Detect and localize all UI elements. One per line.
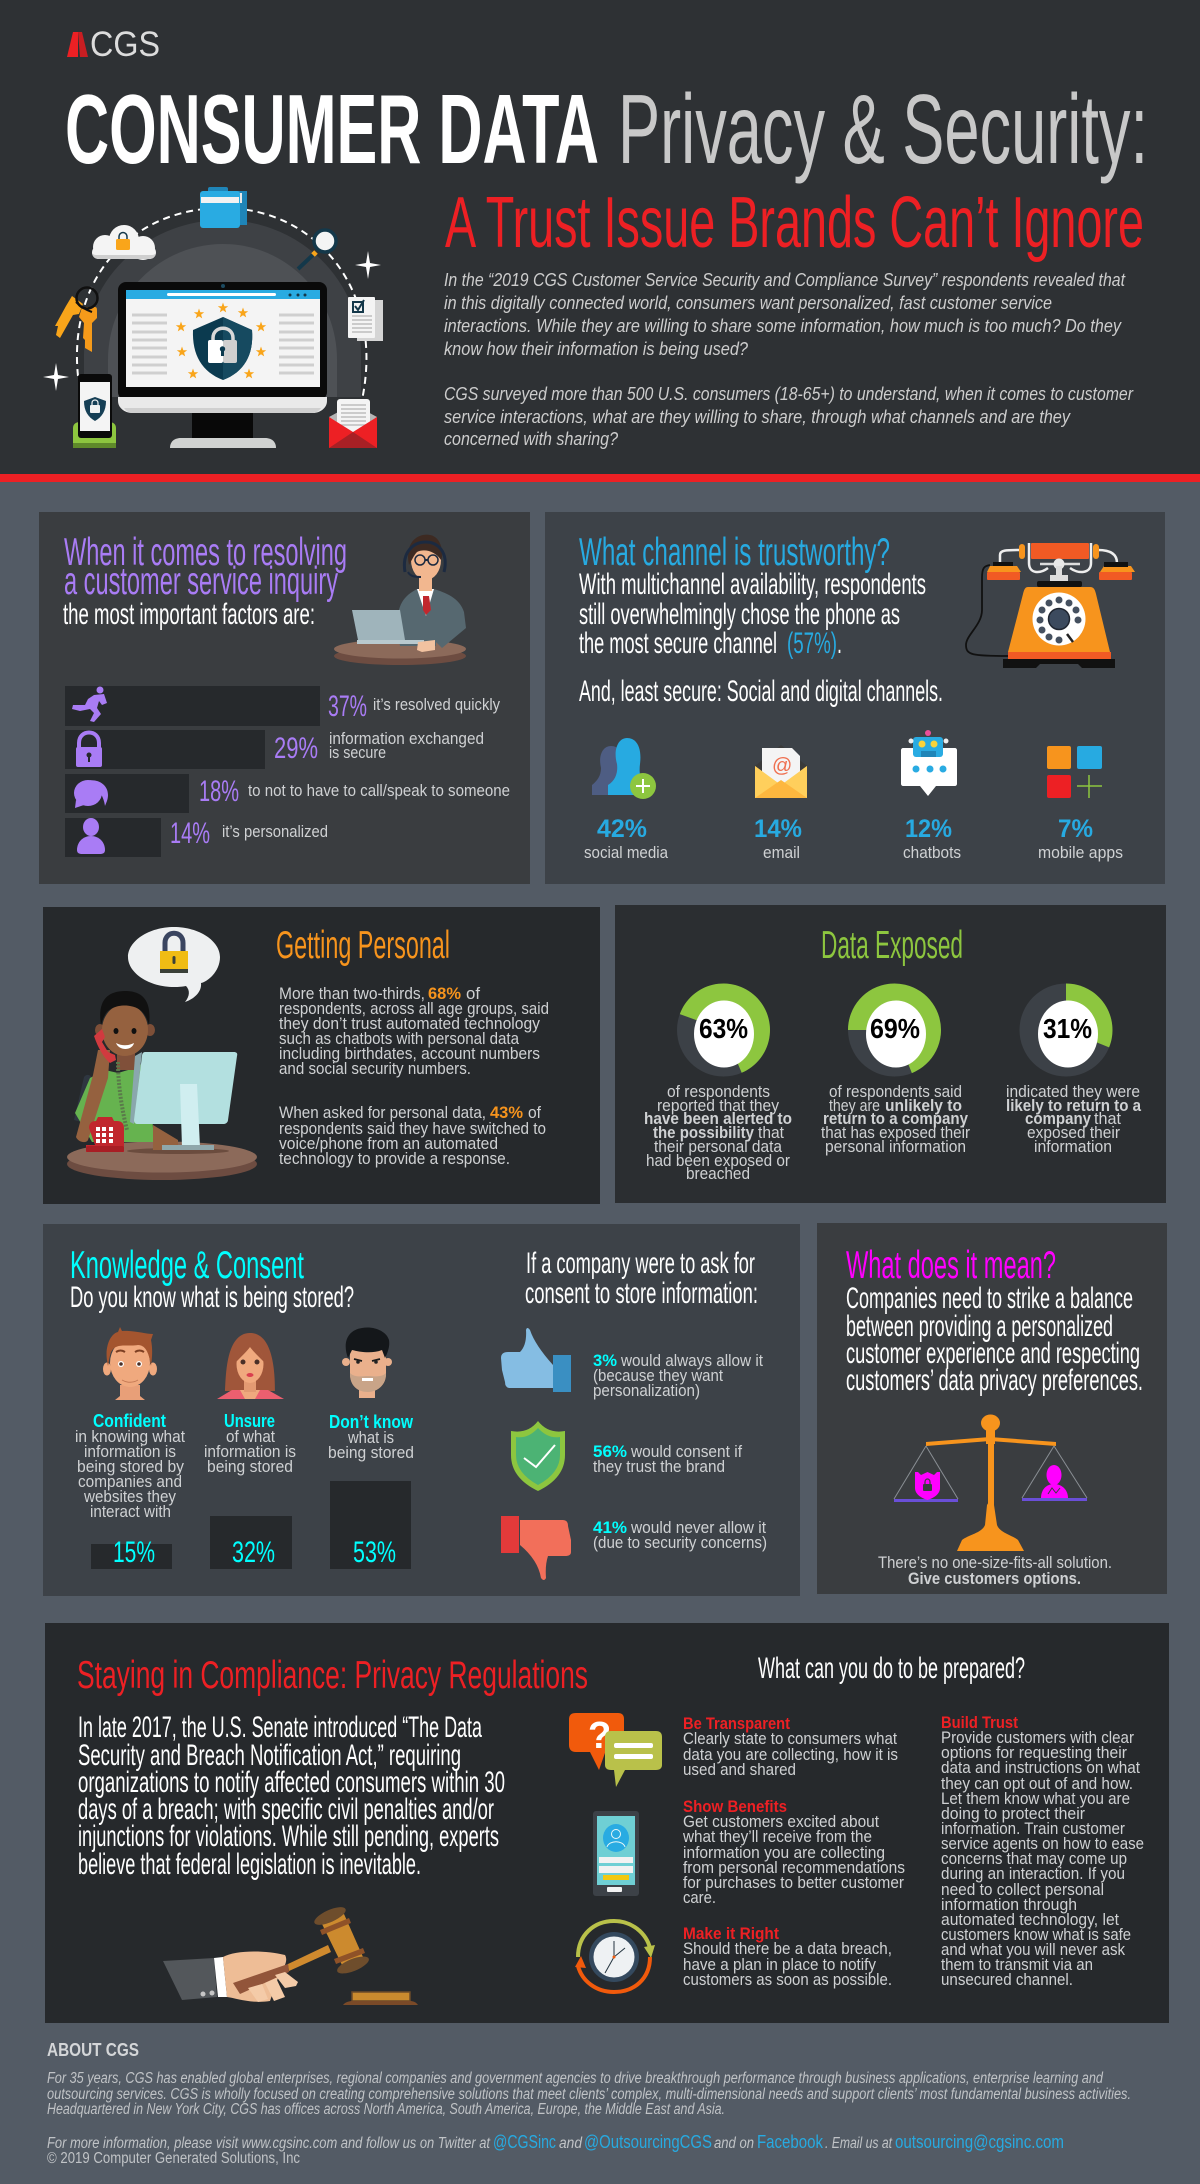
- tip: make it right: [575, 1921, 892, 1992]
- footer: contact line: [47, 2132, 1064, 2167]
- bar: information secure: 29%: [274, 732, 318, 765]
- monitor: [118, 282, 327, 448]
- column: confident: interact with: [90, 1503, 171, 1521]
- footer: about CGS: [47, 2040, 1131, 2118]
- text block: [846, 1282, 1143, 1397]
- bar: no call: 18%: [199, 775, 239, 808]
- icon: lock: [76, 732, 102, 767]
- tip: be transparent: data you are collecting, how it is: [683, 1746, 898, 1764]
- text block: With multichannel availability, respondents: [579, 568, 926, 601]
- illustration: security monitor and devices: [43, 187, 383, 448]
- heading: When it comes to resolving: [64, 531, 347, 574]
- tip: build trust: service agents on how to ease: [941, 1835, 1144, 1853]
- heading: the most important factors are:: [63, 598, 315, 631]
- text: 63%: have been alerted to: [644, 1110, 792, 1128]
- text block: (57%): [787, 627, 837, 660]
- bar: 53%: [330, 1481, 411, 1569]
- donut: 31%: [1020, 984, 1112, 1076]
- text block: organizations to notify affected consumers within 30: [78, 1766, 505, 1799]
- text: 63%: that: [758, 1124, 784, 1142]
- channel: mobile apps: mobile apps: [1038, 844, 1123, 862]
- face: man: [103, 1327, 157, 1400]
- text: 69%: they are: [829, 1097, 880, 1115]
- tip: build trust: doing to protect their: [941, 1805, 1085, 1823]
- column: unsure: [204, 1333, 296, 1569]
- column: unsure: information is: [204, 1443, 296, 1461]
- tip: build trust: need to collect personal: [941, 1881, 1104, 1899]
- footer: contact line: and: [559, 2135, 583, 2152]
- text: 63%: [644, 1083, 792, 1183]
- intro text: service interactions, what are they willing to share, through what channels and are they: [444, 407, 1071, 427]
- text block: Security and Breach Notification Act,” requiring: [78, 1739, 461, 1772]
- cloud lock: [92, 225, 156, 260]
- channel: social media: 42%: [597, 815, 647, 843]
- text: 63%: of respondents: [667, 1083, 770, 1101]
- icon: smartphone: [593, 1811, 639, 1896]
- footer: contact line: © 2019 Computer Generated Solutions, Inc: [47, 2150, 300, 2167]
- bar: resolved quickly: it’s resolved quickly: [373, 696, 501, 714]
- bar: personalized: 14%: [170, 817, 210, 850]
- tip: build trust: they can opt out of and how.: [941, 1775, 1133, 1793]
- text: 31%: likely to return to a: [1006, 1097, 1142, 1115]
- text: 63%: reported that they: [657, 1097, 780, 1115]
- text block: voice/phone from an automated: [279, 1135, 498, 1153]
- consent row: always allow: 3%: [593, 1352, 617, 1370]
- text: 69%: personal information: [825, 1138, 966, 1156]
- panel: getting personal: [43, 907, 600, 1204]
- heading: consent: [525, 1247, 758, 1310]
- channel: mobile apps: [1038, 746, 1123, 862]
- column: confident: companies and: [78, 1473, 182, 1491]
- text: 31%: indicated they were: [1006, 1083, 1140, 1101]
- phone on dock: [73, 374, 116, 448]
- footer: contact line: and on: [714, 2135, 754, 2152]
- panel: staying in compliance: [45, 1623, 1169, 2023]
- heading: Knowledge & Consent: [70, 1244, 304, 1287]
- footer: about CGS: ABOUT CGS: [47, 2040, 139, 2060]
- text block: 68%: [428, 985, 461, 1003]
- text block: When asked for personal data,: [279, 1104, 486, 1122]
- icon: apps: [1047, 746, 1102, 798]
- text: 63%: had been exposed or: [646, 1152, 790, 1170]
- text block: [279, 985, 549, 1168]
- shield with lock: [193, 317, 252, 380]
- tip: build trust: unsecured channel.: [941, 1971, 1073, 1989]
- text block: believe that federal legislation is inevitable.: [78, 1848, 421, 1881]
- channel: chatbots: chatbots: [903, 844, 961, 862]
- donut: 63%: 63%: [699, 1013, 748, 1044]
- intro text: in this digitally connected world, consumers want personalized, fast customer service: [444, 293, 1052, 313]
- envelope: [329, 399, 377, 448]
- icon: social media: [592, 738, 656, 799]
- footer: about CGS: Headquartered in New York City, CGS has offices across North America, South America, Europe, the Middle East and Asia.: [47, 2101, 725, 2118]
- tip: make it right: Make it Right: [683, 1924, 779, 1943]
- footer: contact line: Facebook: [757, 2132, 824, 2152]
- tip: show benefits: for purchases to better customer: [683, 1874, 904, 1892]
- consent row: trust the brand: would consent if: [630, 1443, 742, 1461]
- icon: person: [1041, 1465, 1068, 1498]
- tip: be transparent: [569, 1713, 898, 1787]
- text block: And, least secure: Social and digital channels.: [579, 675, 943, 708]
- footer: contact line: @OutsourcingCGS: [584, 2132, 712, 2152]
- text block: including birthdates, account numbers: [279, 1045, 540, 1063]
- magnifier: [298, 230, 336, 269]
- header panel: [0, 0, 1200, 482]
- caption: There’s no one-size-fits-all solution.: [878, 1554, 1112, 1572]
- panel: data exposed: [615, 905, 1166, 1203]
- icon: shield check: [511, 1421, 565, 1491]
- footer: contact line: outsourcing@cgsinc.com: [895, 2132, 1064, 2152]
- panel: trustworthy channel: [545, 512, 1165, 884]
- tip: build trust: information through: [941, 1896, 1077, 1914]
- text: 31%: that: [1094, 1110, 1121, 1128]
- column: confident: in knowing what: [75, 1428, 185, 1446]
- consent row: never allow: would never allow it: [630, 1519, 766, 1537]
- panel: knowledge and consent: [43, 1224, 800, 1596]
- column: unsure: Unsure: [224, 1411, 275, 1431]
- tip: be transparent: Clearly state to consumers what: [683, 1730, 897, 1748]
- column: don't know: what is: [347, 1429, 394, 1447]
- tip: show benefits: [593, 1797, 905, 1907]
- text: 31%: company: [1025, 1110, 1092, 1128]
- bar: personalized: [65, 817, 328, 857]
- tip: build trust: Provide customers with clear: [941, 1729, 1134, 1747]
- keys: [55, 288, 98, 352]
- tip: build trust: options for requesting their: [941, 1744, 1127, 1762]
- donut: 69%: [848, 983, 941, 1076]
- bar: information secure: information exchanged: [329, 730, 484, 748]
- channel: social media: social media: [584, 844, 669, 862]
- speech bubble with lock: [128, 927, 220, 1002]
- heading: What channel is trustworthy?: [579, 531, 890, 574]
- text: 69%: [821, 1083, 970, 1156]
- heading: Getting Personal: [276, 924, 450, 967]
- heading: consent: If a company were to ask for: [526, 1247, 755, 1280]
- footer: contact line: . Email us at: [825, 2135, 893, 2152]
- text block: injunctions for violations. While still pending, experts: [78, 1820, 499, 1853]
- tip: show benefits: what they’ll receive from the: [682, 1828, 872, 1846]
- icon: runner: [72, 686, 107, 722]
- illustration: man on the phone: [67, 927, 257, 1180]
- consent row: trust the brand: 56%: [593, 1443, 627, 1461]
- text block: respondents, across all age groups, said: [279, 1000, 549, 1018]
- consent row: always allow: personalization): [593, 1382, 700, 1400]
- icon: speech: [74, 780, 108, 808]
- icon: speech bubbles: [569, 1713, 662, 1787]
- logo: CGS: CGS: [90, 25, 160, 64]
- bar: no call: [65, 774, 510, 813]
- bar: 32%: [210, 1516, 292, 1569]
- consent row: trust the brand: they trust the brand: [593, 1458, 725, 1476]
- tip: be transparent: Be Transparent: [683, 1714, 790, 1733]
- heading: a customer service inquiry: [64, 560, 338, 603]
- text block: .: [837, 627, 842, 660]
- text: 31%: information: [1034, 1138, 1112, 1156]
- text block: they don’t trust automated technology: [279, 1015, 541, 1033]
- consent row: never allow: 41%: [593, 1519, 627, 1537]
- icon: email: @: [772, 755, 792, 777]
- tip: build trust: concerns that may come up: [941, 1850, 1127, 1868]
- consent row: always allow: [501, 1328, 763, 1400]
- column: confident: being stored by: [77, 1458, 185, 1476]
- bar: 32%: 32%: [232, 1536, 275, 1569]
- donut: 31%: 31%: [1043, 1013, 1092, 1044]
- tip: be transparent: used and shared: [683, 1761, 796, 1779]
- intro text: concerned with sharing?: [444, 429, 618, 449]
- panel: customer service factors: [39, 512, 530, 884]
- text block: 43%: [490, 1104, 523, 1122]
- heading: What does it mean?: [846, 1244, 1056, 1287]
- text block: of: [466, 985, 480, 1003]
- text: 63%: breached: [686, 1165, 750, 1183]
- tip: make it right: have a plan in place to notify: [683, 1956, 877, 1974]
- text: 31%: [1006, 1083, 1142, 1156]
- tip: show benefits: from personal recommendations: [683, 1859, 905, 1877]
- title: CONSUMER DATA: [65, 74, 599, 184]
- bar: resolved quickly: 37%: [328, 690, 367, 723]
- tip: build trust: data and instructions on what: [941, 1759, 1140, 1777]
- text block: respondents said they have switched to: [279, 1120, 546, 1138]
- illustration: gavel: [163, 1904, 418, 2005]
- bar: 53%: 53%: [353, 1536, 396, 1569]
- donut: 69%: 69%: [870, 1013, 920, 1044]
- text: 63%: their personal data: [654, 1138, 783, 1156]
- consent row: trust the brand: [511, 1421, 742, 1491]
- heading: Staying in Compliance: Privacy Regulations: [77, 1654, 588, 1697]
- consent row: always allow: (because they want: [593, 1367, 723, 1385]
- consent row: never allow: (due to security concerns): [593, 1534, 767, 1552]
- column: unsure: being stored: [207, 1458, 293, 1476]
- heading: prepared: What can you do to be prepared?: [758, 1652, 1025, 1685]
- text block: technology to provide a response.: [279, 1150, 510, 1168]
- column: confident: information is: [84, 1443, 176, 1461]
- column: confident: Confident: [93, 1411, 166, 1431]
- text: 69%: of respondents said: [829, 1083, 962, 1101]
- column: don't know: Don’t know: [329, 1412, 414, 1432]
- heading: Do you know what is being stored?: [70, 1281, 354, 1314]
- footer: contact line: @CGSinc: [493, 2132, 556, 2152]
- tip: show benefits: Show Benefits: [683, 1797, 787, 1816]
- intro text: In the “2019 CGS Customer Service Security and Compliance Survey” respondents revealed that: [444, 270, 1126, 290]
- icon: shield: [915, 1472, 940, 1500]
- tip: build trust: customers know what is safe: [941, 1926, 1131, 1944]
- face: man with stubble: [342, 1328, 392, 1398]
- folder: [200, 187, 247, 228]
- heading: [70, 1244, 354, 1314]
- icon: thumbs down: [501, 1516, 571, 1580]
- text: 69%: that has exposed their: [821, 1124, 970, 1142]
- icon: speech bubbles: ?: [588, 1715, 611, 1757]
- channel: email: 14%: [754, 815, 802, 843]
- donut: 63%: [677, 984, 770, 1076]
- tip: show benefits: care.: [683, 1889, 716, 1907]
- icon: clock: [575, 1921, 655, 1992]
- column: confident: [75, 1327, 185, 1569]
- channel: mobile apps: 7%: [1058, 815, 1093, 843]
- footer: contact line: For more information, please visit www.cgsinc.com and follow us on Twitter at: [47, 2135, 491, 2152]
- caption: [878, 1554, 1112, 1588]
- intro text: interactions. While they are willing to share some information, how much is too much? Do they: [444, 316, 1122, 336]
- text block: of: [528, 1104, 541, 1122]
- text block: still overwhelmingly chose the phone as: [579, 598, 900, 631]
- illustration: call agent: [334, 535, 466, 665]
- intro text: [444, 270, 1134, 449]
- text block: [579, 568, 943, 708]
- text block: the most secure channel: [579, 627, 777, 660]
- bar: personalized: it’s personalized: [222, 823, 328, 841]
- document: [348, 297, 383, 341]
- bar: information secure: is secure: [329, 744, 386, 762]
- text block: In late 2017, the U.S. Senate introduced “The Data: [78, 1711, 482, 1744]
- bar: no call: to not to have to call/speak to someone: [248, 782, 510, 800]
- text block: [78, 1711, 505, 1881]
- text block: More than two-thirds,: [279, 985, 425, 1003]
- illustration: balance scale: [894, 1414, 1087, 1551]
- channel: email: [754, 745, 807, 862]
- tip: build trust: and what you will never ask: [941, 1941, 1126, 1959]
- text: 31%: exposed their: [1027, 1124, 1120, 1142]
- tip: show benefits: Get customers excited about: [683, 1813, 879, 1831]
- bar: information secure: [65, 730, 484, 769]
- tip: build trust: Let them know what you are: [941, 1790, 1130, 1808]
- consent row: never allow: [501, 1516, 767, 1580]
- column: confident: websites they: [83, 1488, 177, 1506]
- icon: chatbot: [901, 730, 957, 796]
- text block: days of a breach; with specific civil penalties and/or: [78, 1793, 494, 1826]
- text block: and social security numbers.: [279, 1060, 471, 1078]
- channel: chatbots: 12%: [905, 815, 952, 843]
- channel: email: email: [763, 844, 800, 862]
- bar: 15%: 15%: [113, 1536, 155, 1569]
- icon: thumbs up: [501, 1328, 571, 1392]
- tip: make it right: customers as soon as possible.: [683, 1971, 892, 1989]
- channel: social media: [584, 738, 669, 862]
- heading: consent: consent to store information:: [525, 1277, 758, 1310]
- text: 69%: unlikely to: [885, 1097, 962, 1115]
- tip: build trust: during an interaction. If you: [941, 1865, 1125, 1883]
- channel: chatbots: [901, 730, 961, 862]
- caption: Give customers options.: [908, 1570, 1081, 1588]
- tip: build trust: automated technology, let: [941, 1911, 1119, 1929]
- text: 69%: return to a company: [823, 1110, 969, 1128]
- column: don't know: being stored: [328, 1444, 414, 1462]
- bar: resolved quickly: [65, 686, 501, 726]
- tip: build trust: information. Train customer: [941, 1820, 1125, 1838]
- text: 63%: the possibility: [653, 1124, 755, 1142]
- tip: build trust: Build Trust: [941, 1713, 1018, 1732]
- intro text: know how their information is being used?: [444, 339, 748, 359]
- text block: such as chatbots with personal data: [279, 1030, 520, 1048]
- face: woman: [217, 1333, 284, 1399]
- panel: what does it mean: [817, 1223, 1167, 1594]
- column: don't know: [328, 1328, 414, 1569]
- heading: [63, 531, 347, 631]
- tip: build trust: them to transmit via an: [941, 1956, 1093, 1974]
- tip: show benefits: information you are collecting: [683, 1844, 885, 1862]
- illustration: rotary phone: [966, 543, 1135, 668]
- consent row: always allow: would always allow it: [620, 1352, 763, 1370]
- column: unsure: of what: [226, 1428, 275, 1446]
- heading: Data Exposed: [821, 924, 963, 967]
- tip: make it right: Should there be a data breach,: [683, 1940, 892, 1958]
- tip: build trust: [941, 1713, 1144, 1989]
- icon: person: [77, 818, 105, 854]
